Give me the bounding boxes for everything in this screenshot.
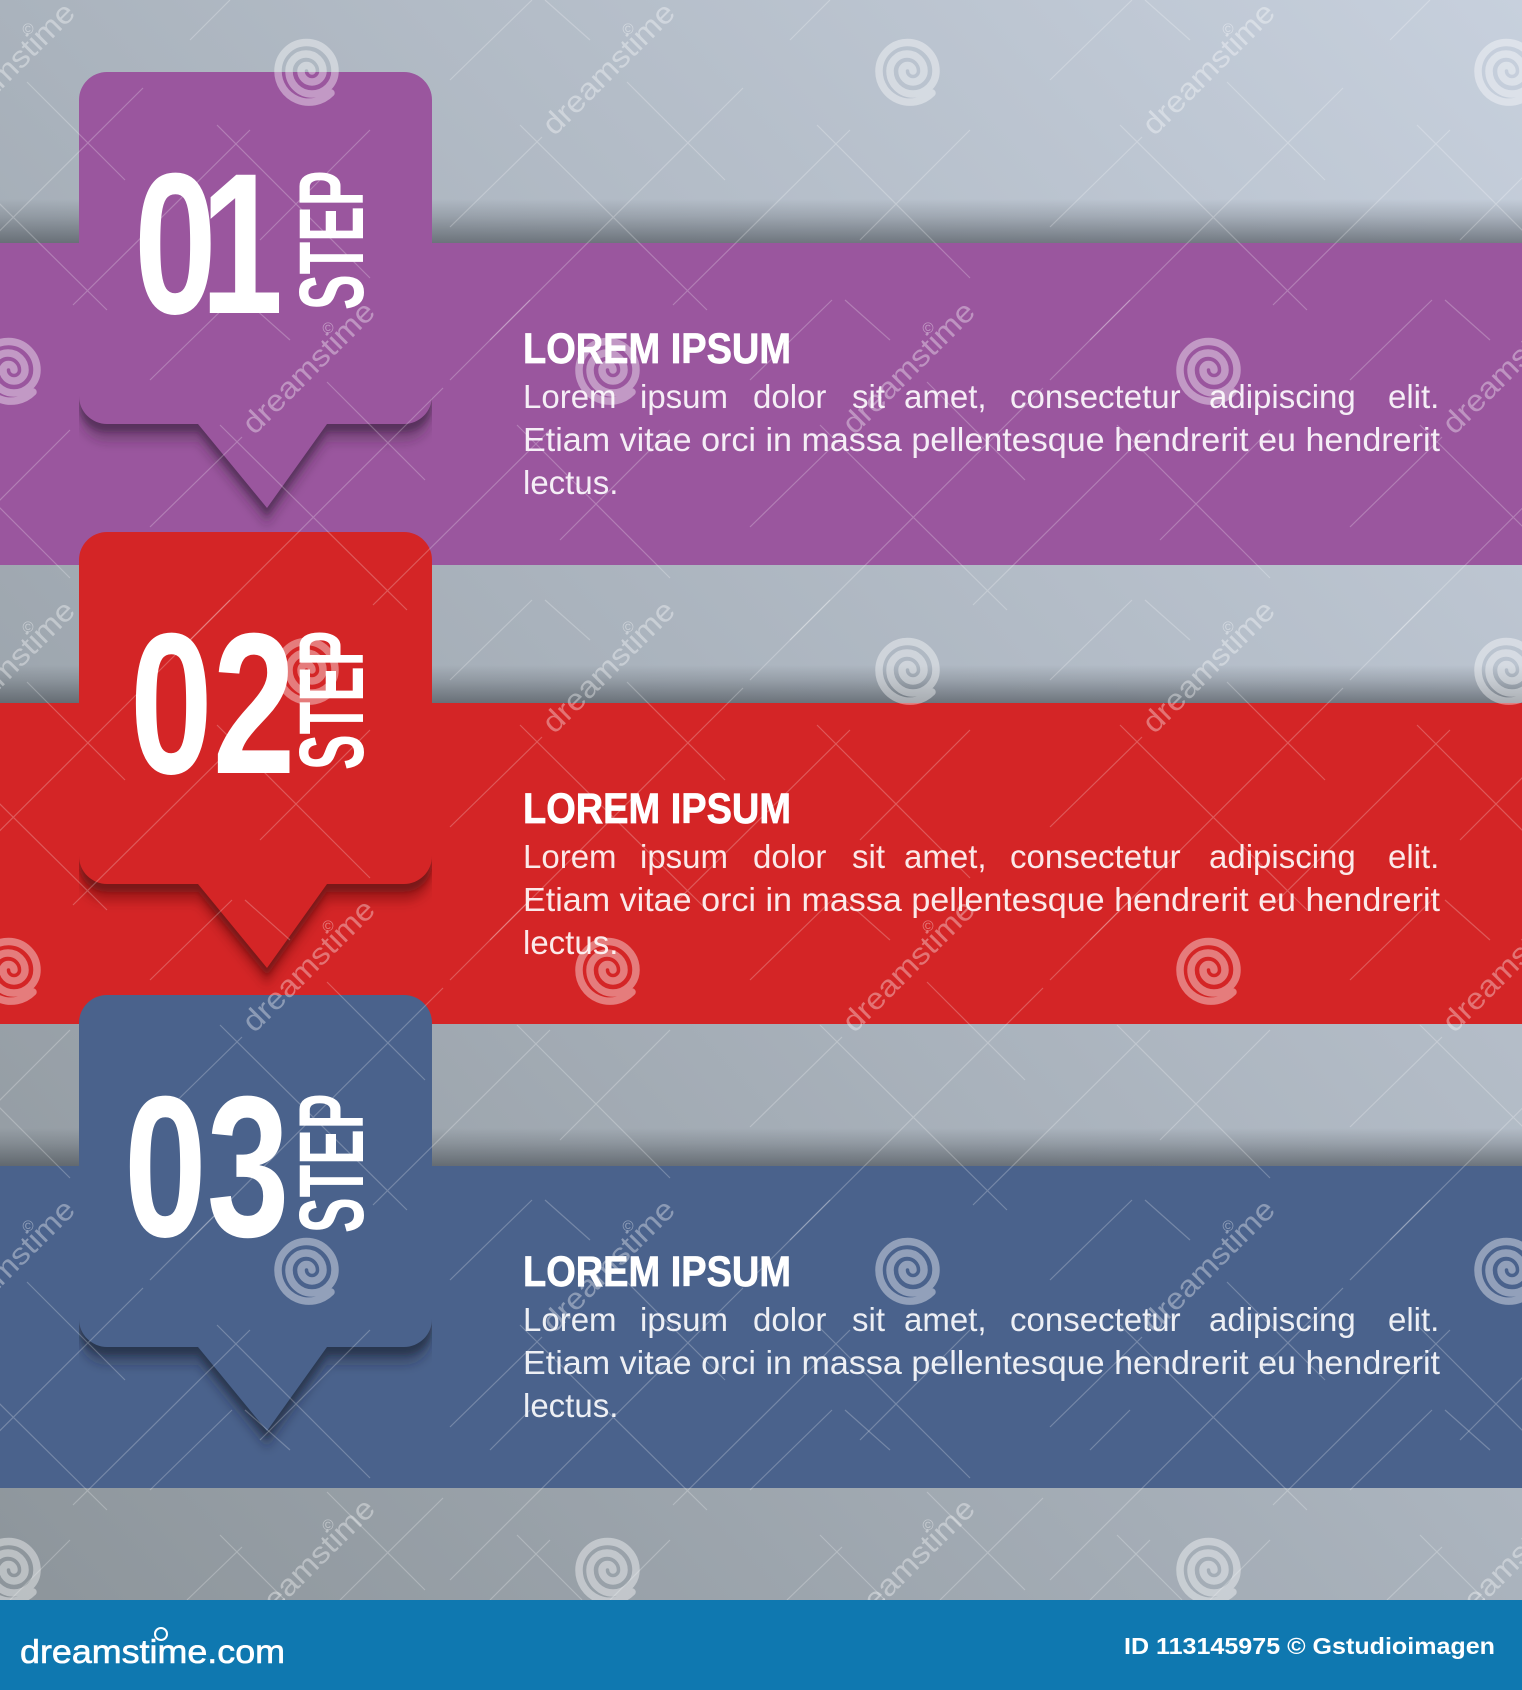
body text 01: dolor (753, 378, 836, 415)
shadow above purple band (0, 199, 1522, 243)
body text 02: elit. (1388, 838, 1439, 875)
watermark text: © (622, 1218, 634, 1235)
body text 03: sit (852, 1301, 894, 1338)
watermark text: © (922, 320, 934, 337)
panel: step 02 (0, 532, 1522, 1024)
panel: step 01: lectus. (523, 464, 618, 501)
speech bubble 01 (79, 72, 432, 508)
watermark text: dreamstime (236, 295, 382, 441)
step label 03: STEP (280, 1094, 383, 1233)
watermark text: © (22, 21, 34, 38)
blue band (0, 1166, 1522, 1488)
body text 02: consectetur (1010, 838, 1190, 875)
icon: small spiral over logo (155, 1628, 167, 1640)
body text 01: consectetur (1010, 378, 1190, 415)
heading 01: LOREM IPSUM (523, 325, 791, 373)
body text 02: amet, (904, 838, 996, 875)
body text 01: amet, (904, 378, 996, 415)
footer logo text: dreamstime.com (20, 1633, 285, 1670)
panel: step 03: Etiam vitae orci in massa pellentesque hendrerit eu hendrerit (523, 1344, 1440, 1381)
panel: step 02: lectus. (523, 924, 618, 961)
panel: step 03 (0, 995, 1522, 1488)
body text 01: adipiscing (1209, 378, 1365, 415)
number 02: 02 (130, 592, 295, 816)
watermark text: dreamstime (536, 594, 682, 740)
watermark text: © (322, 320, 334, 337)
body text 01: ipsum (640, 378, 737, 415)
footer bar (0, 1600, 1522, 1690)
watermark text: dreamstime (236, 1492, 382, 1638)
step label 01: STEP (280, 171, 383, 310)
watermark text: dreamstime (1136, 0, 1282, 142)
panel: step 01 (0, 72, 1522, 565)
body text 02: dolor (753, 838, 836, 875)
watermark text: dreamstime (836, 893, 982, 1039)
body text 03: elit. (1388, 1301, 1439, 1338)
watermark text: dreamstime (836, 1492, 982, 1638)
watermark text: dreamstime (236, 893, 382, 1039)
body text 01: elit. (1388, 378, 1439, 415)
heading 02: LOREM IPSUM (523, 785, 791, 833)
watermark text: dreamstime (536, 1193, 682, 1339)
purple band (0, 243, 1522, 565)
panel: step 01: Etiam vitae orci in massa pellentesque hendrerit eu hendrerit (523, 421, 1440, 458)
watermark text: © (922, 918, 934, 935)
watermark text: © (922, 1517, 934, 1534)
bubble shadow 01 (79, 398, 432, 526)
body text 03: consectetur (1010, 1301, 1190, 1338)
speech bubble 02 (79, 532, 432, 968)
watermark text: dreamstime (1136, 594, 1282, 740)
body text 01: sit (852, 378, 894, 415)
bubble shadow 03 (79, 1321, 432, 1449)
body text 02: ipsum (640, 838, 737, 875)
body text 03: adipiscing (1209, 1301, 1365, 1338)
watermark text: © (1222, 1218, 1234, 1235)
watermark text: © (1222, 619, 1234, 636)
shadow above red band (0, 665, 1522, 703)
watermark text: © (22, 619, 34, 636)
bubble shadow 02 (79, 858, 432, 986)
image id and credit: ID 113145975 © Gstudioimagen (1124, 1633, 1495, 1659)
watermark text: dreamstime (836, 295, 982, 441)
watermark text: © (1222, 21, 1234, 38)
red band (0, 703, 1522, 1024)
body text 03: amet, (904, 1301, 996, 1338)
step label 02: STEP (280, 631, 383, 770)
heading 03: LOREM IPSUM (523, 1248, 791, 1296)
body text 02: Lorem (523, 838, 626, 875)
watermark text: © (322, 918, 334, 935)
watermark text: © (22, 1218, 34, 1235)
body text 01: Lorem (523, 378, 626, 415)
number 03: 03 (124, 1055, 289, 1279)
body text 03: dolor (753, 1301, 836, 1338)
watermark text: © (622, 21, 634, 38)
watermark text: dreamstime (536, 0, 682, 142)
number 01: 01 (134, 132, 280, 356)
body text 02: adipiscing (1209, 838, 1365, 875)
body text 03: Lorem (523, 1301, 626, 1338)
watermark text: © (322, 1517, 334, 1534)
body text 02: sit (852, 838, 894, 875)
panel: step 03: lectus. (523, 1387, 618, 1424)
body text 03: ipsum (640, 1301, 737, 1338)
panel: step 02: Etiam vitae orci in massa pellentesque hendrerit eu hendrerit (523, 881, 1440, 918)
speech bubble 03 (79, 995, 432, 1431)
watermark text: © (622, 619, 634, 636)
watermark text: dreamstime (1136, 1193, 1282, 1339)
shadow above blue band (0, 1128, 1522, 1166)
